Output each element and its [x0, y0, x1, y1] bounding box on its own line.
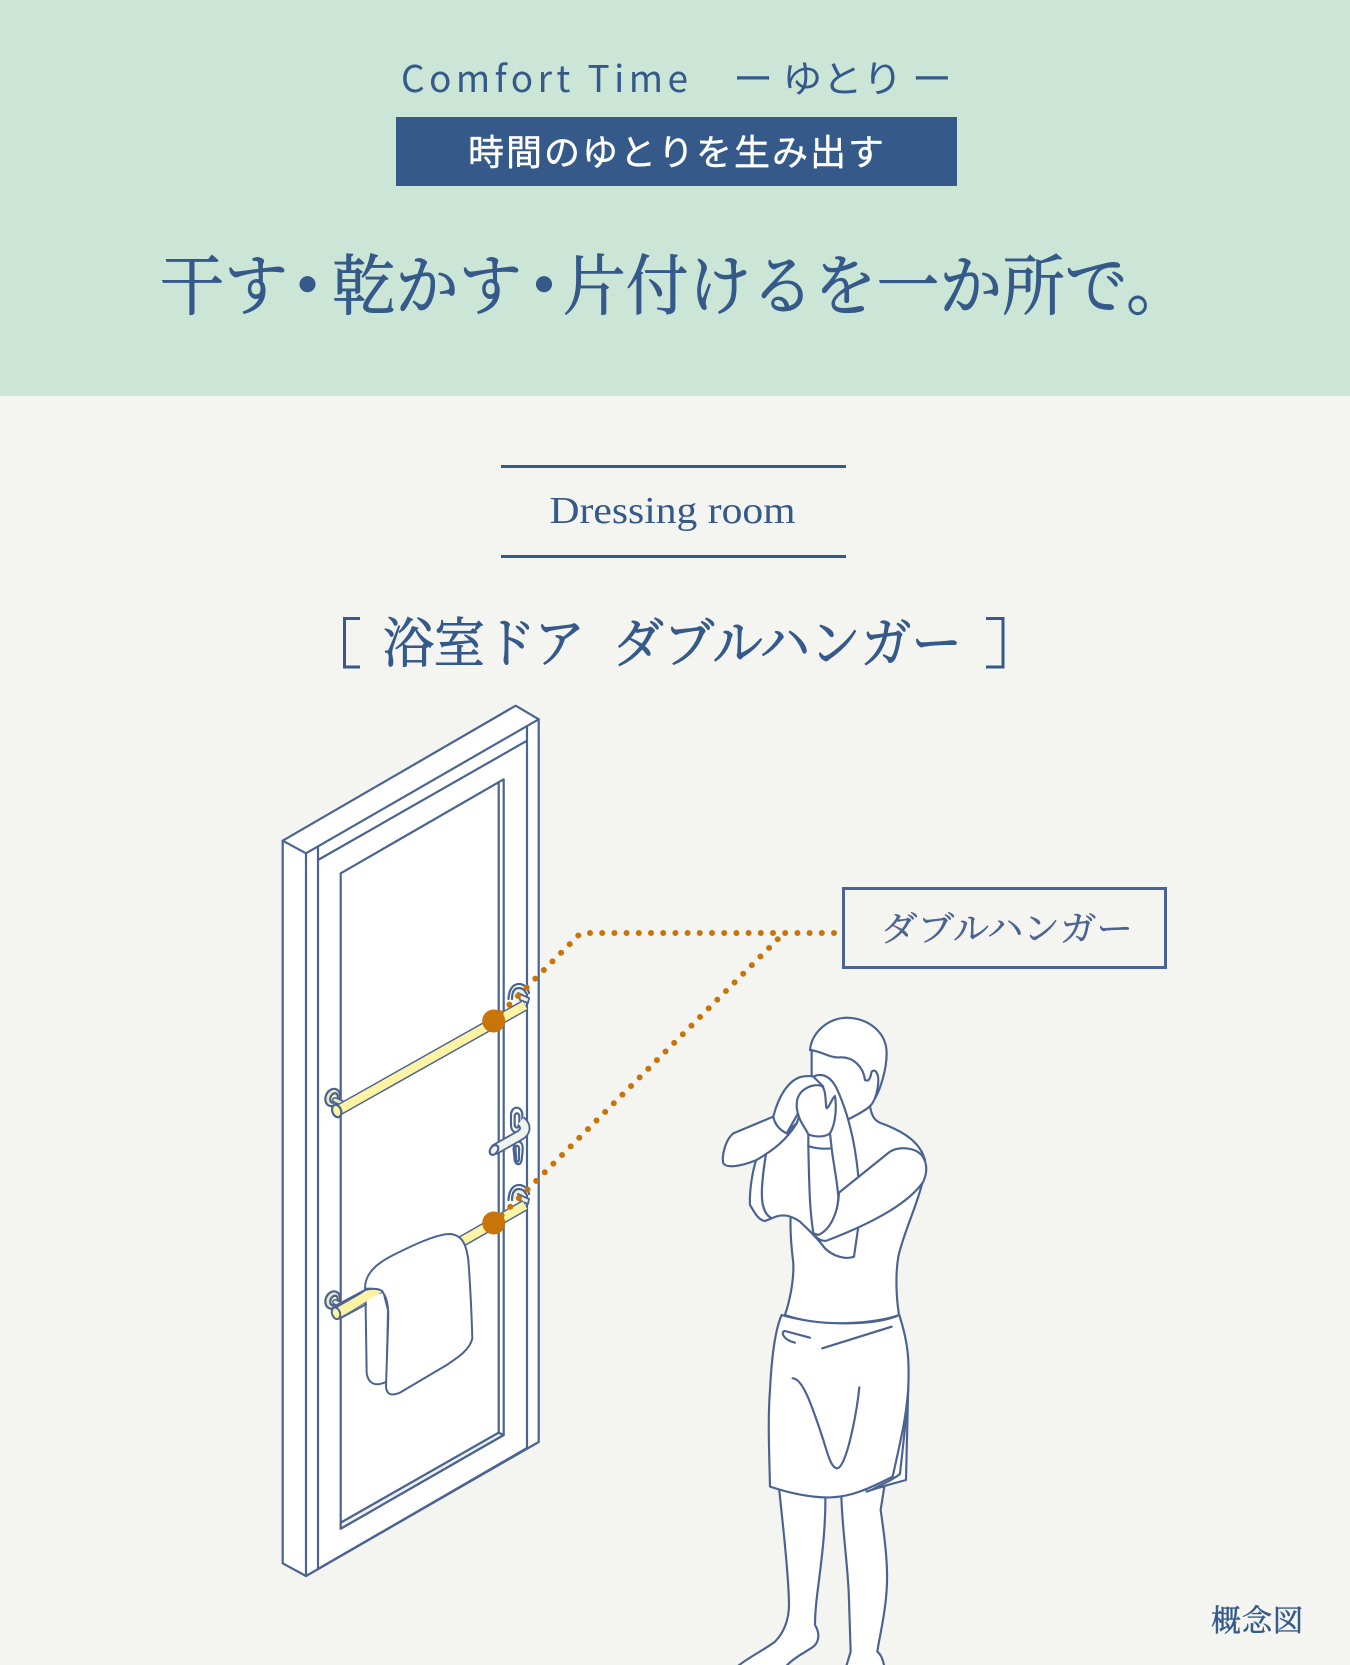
- section label: Dressing room: [501, 465, 846, 558]
- upper hanger bar: [323, 984, 529, 1119]
- main heading: 干す: [160, 233, 288, 328]
- torso: [785, 1106, 925, 1323]
- main heading: [160, 233, 1189, 328]
- eyebrow: Comfort Time: [401, 49, 952, 103]
- main heading: ・: [274, 233, 340, 328]
- towel around neck: [750, 1075, 858, 1258]
- callout: double hanger label: ダブルハンガー: [881, 902, 1133, 952]
- door handle: [488, 1108, 525, 1164]
- banner: subtitle: [396, 117, 957, 186]
- head: [810, 1018, 887, 1119]
- arms and hands: [723, 1076, 926, 1241]
- eyebrow: Comfort Time: Comfort Time: [401, 49, 688, 103]
- subheading: product name: [344, 601, 1003, 678]
- leader lines: dotted connectors: [498, 933, 834, 1219]
- main heading: ・: [511, 233, 577, 328]
- section label: Dressing room: Dressing room: [550, 490, 796, 532]
- banner: subtitle: 時間のゆとりを生み出す: [468, 124, 884, 176]
- illustration: man drying face: [723, 1018, 926, 1665]
- lower hanger bar: [323, 1185, 529, 1313]
- header band: [0, 0, 1350, 396]
- eyebrow: Comfort Time: ー ゆとり ー: [733, 49, 952, 103]
- main heading: 片付けるを一か所で。: [563, 233, 1189, 328]
- illustration: bathroom door: [283, 706, 539, 1576]
- towel wrap: [769, 1315, 909, 1497]
- subheading: product name: 浴室ドア: [383, 601, 585, 678]
- legs: [730, 1487, 887, 1665]
- subheading: product name: ダブルハンガー: [613, 601, 962, 678]
- hanger markers: [482, 1010, 505, 1234]
- towel on lower bar: [330, 1234, 472, 1394]
- main heading: 乾かす: [332, 233, 522, 328]
- note: conceptual diagram: 概念図: [1211, 1596, 1303, 1640]
- callout: double hanger label: [844, 888, 1166, 968]
